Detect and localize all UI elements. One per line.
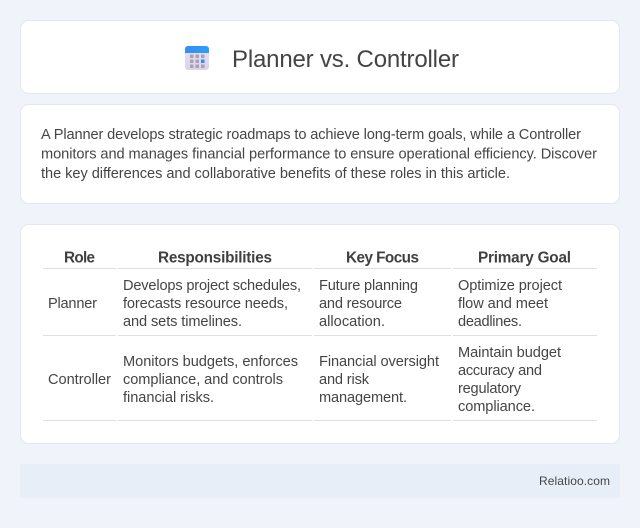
- panel: introduction: [20, 104, 620, 204]
- table row: Controller: Controller: [48, 372, 111, 388]
- table row: Planner: [48, 278, 562, 330]
- table row: Planner: Optimize project: [458, 278, 562, 294]
- table row: Controller: [48, 345, 561, 415]
- table row: Controller: Monitors budgets, enforces: [123, 354, 298, 370]
- table header row: Key Focus: [346, 250, 419, 266]
- table header row: Primary Goal: [478, 250, 571, 266]
- intro text: monitors and manages financial performance to ensure operational efficiency. Discover: [41, 146, 597, 162]
- table row: Controller: Financial oversight: [319, 354, 439, 370]
- table row: Controller: compliance, and controls: [123, 372, 283, 388]
- footer credit: Relatioo.com: [539, 474, 610, 488]
- intro text: the key differences and collaborative benefits of these roles in this article.: [41, 166, 510, 182]
- table row: Planner: allocation.: [319, 314, 385, 330]
- table row: Controller: accuracy and: [458, 363, 542, 379]
- table row: Planner: flow and meet: [458, 296, 548, 312]
- table header row: Responsibilities: [158, 250, 272, 266]
- table header row: [64, 250, 571, 266]
- table row: Controller: and risk: [319, 372, 370, 388]
- icon: calendar: [185, 46, 209, 70]
- title: Planner vs. Controller: [232, 46, 459, 73]
- table row: Controller: Maintain budget: [458, 345, 561, 361]
- table row: Controller: management.: [319, 390, 407, 406]
- table row: Planner: deadlines.: [458, 314, 522, 330]
- footer: [20, 464, 620, 498]
- table row: Planner: and resource: [319, 296, 402, 312]
- table row: Controller: financial risks.: [123, 390, 214, 406]
- table row: Planner: Future planning: [319, 278, 418, 294]
- table row: Controller: regulatory: [458, 381, 522, 397]
- table row: Planner: Develops project schedules,: [123, 278, 301, 294]
- intro text: [41, 127, 597, 182]
- intro text: A Planner develops strategic roadmaps to achieve long-term goals, while a Controller: [41, 127, 581, 143]
- panel: header: [20, 20, 620, 94]
- table row: Controller: compliance.: [458, 399, 535, 415]
- table row: Planner: and sets timelines.: [123, 314, 242, 330]
- table header row: Role: [64, 250, 95, 266]
- table row: Planner: Planner: [48, 296, 97, 312]
- table row: Planner: forecasts resource needs,: [123, 296, 288, 312]
- panel: comparison table: [20, 224, 620, 444]
